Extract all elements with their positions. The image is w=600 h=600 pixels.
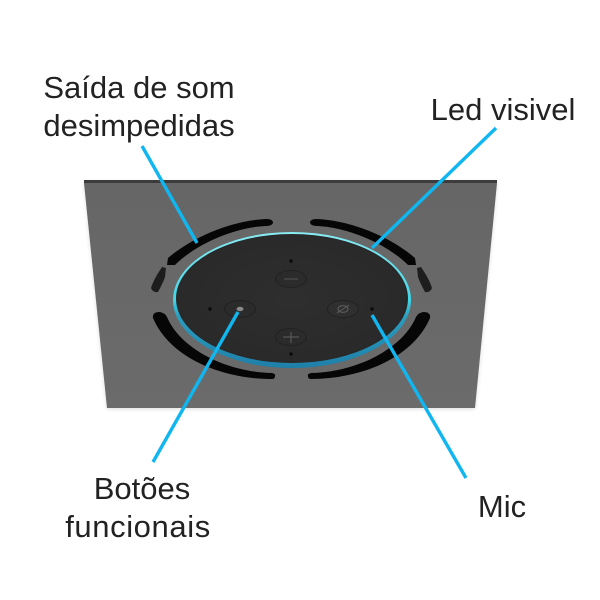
label: Botões funcionais: funcionais: [65, 509, 211, 544]
button: plus: [276, 328, 306, 346]
slot: top right tab: [417, 267, 432, 292]
callout lines: [142, 128, 496, 478]
light ring: [173, 232, 411, 368]
line: mic: [372, 315, 466, 478]
label: Saída de som desimpedidas: Saída de som: [43, 70, 235, 105]
button: action: [224, 300, 256, 318]
label: Led visivel: Led visivel: [431, 92, 575, 127]
label: Botões funcionais: Botões: [94, 471, 190, 506]
speaker: [173, 232, 411, 368]
line: buttons: [153, 312, 238, 462]
slot: top left: [167, 219, 273, 265]
button: mic off: [328, 300, 358, 318]
label: Saída de som desimpedidas: desimpedidas: [43, 108, 235, 143]
microphone dots: [208, 259, 374, 356]
button: minus: [276, 270, 306, 288]
label: Mic: Mic: [478, 489, 526, 524]
slot: top right: [310, 219, 416, 265]
slot: bottom left: [153, 312, 275, 379]
mounting plate: [84, 180, 497, 409]
line: sound outlet: [142, 146, 197, 243]
sound slots: [151, 219, 432, 379]
slot: bottom right: [308, 312, 430, 379]
slot: top left tab: [151, 267, 166, 292]
line: LED: [372, 128, 496, 248]
speaker top: [176, 234, 408, 363]
